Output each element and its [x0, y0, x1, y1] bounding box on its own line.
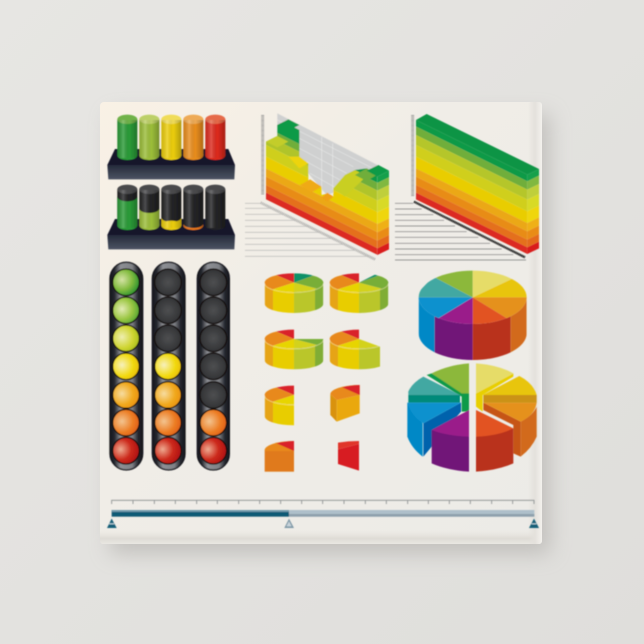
second shelf — [107, 219, 235, 249]
panel: large 3D pie — [418, 270, 528, 361]
pie 4 — [328, 328, 381, 370]
pie 7 — [265, 441, 294, 472]
green slice — [427, 363, 469, 412]
square button face — [100, 102, 542, 544]
meter tube 2 — [152, 262, 185, 470]
coloured cylinders — [117, 115, 225, 160]
stepped front bands — [265, 123, 378, 256]
right handle — [529, 519, 539, 528]
step top faces — [266, 119, 389, 202]
pie 5 — [264, 384, 295, 426]
panel: 3D stepped bar chart — [245, 113, 389, 261]
left handle — [107, 519, 117, 528]
pie 2 — [328, 272, 390, 314]
pie side — [418, 299, 528, 361]
axes and grid lines — [245, 115, 375, 259]
panel: shrinking pie charts — [257, 269, 396, 472]
purple slice — [432, 410, 469, 472]
back wall grid — [277, 113, 379, 195]
top face — [416, 114, 539, 175]
pie 1 — [257, 269, 331, 314]
button shadow — [110, 114, 550, 554]
axes and grid lines — [395, 115, 526, 260]
pie 8 — [338, 441, 359, 471]
orange slice — [483, 403, 537, 457]
pale yellow slice — [476, 363, 513, 412]
meter tube 1 — [110, 262, 143, 470]
panel: exploded 3D pie — [407, 363, 537, 472]
pie 6 — [330, 385, 360, 422]
middle handle — [284, 519, 294, 528]
meter tube 3 — [197, 262, 229, 470]
shelf top — [107, 149, 235, 179]
teal slice — [408, 377, 460, 403]
yellow slice — [483, 376, 537, 403]
pie 3 — [264, 328, 324, 370]
red slice — [476, 410, 513, 472]
track remainder — [112, 510, 534, 517]
pie top — [418, 270, 528, 325]
panel: slider — [107, 500, 539, 528]
panel: 3D full bar chart — [395, 114, 539, 260]
artwork group — [107, 113, 539, 528]
right side face — [527, 169, 539, 254]
track fill — [112, 510, 289, 517]
blue slice — [407, 403, 461, 457]
panel: LED meter tubes — [110, 262, 229, 470]
front bands — [416, 120, 527, 254]
right side face — [377, 171, 389, 255]
panel: cylinder bars on shelves — [107, 115, 235, 249]
partly filled cylinders — [117, 185, 225, 230]
ruler — [112, 500, 534, 504]
